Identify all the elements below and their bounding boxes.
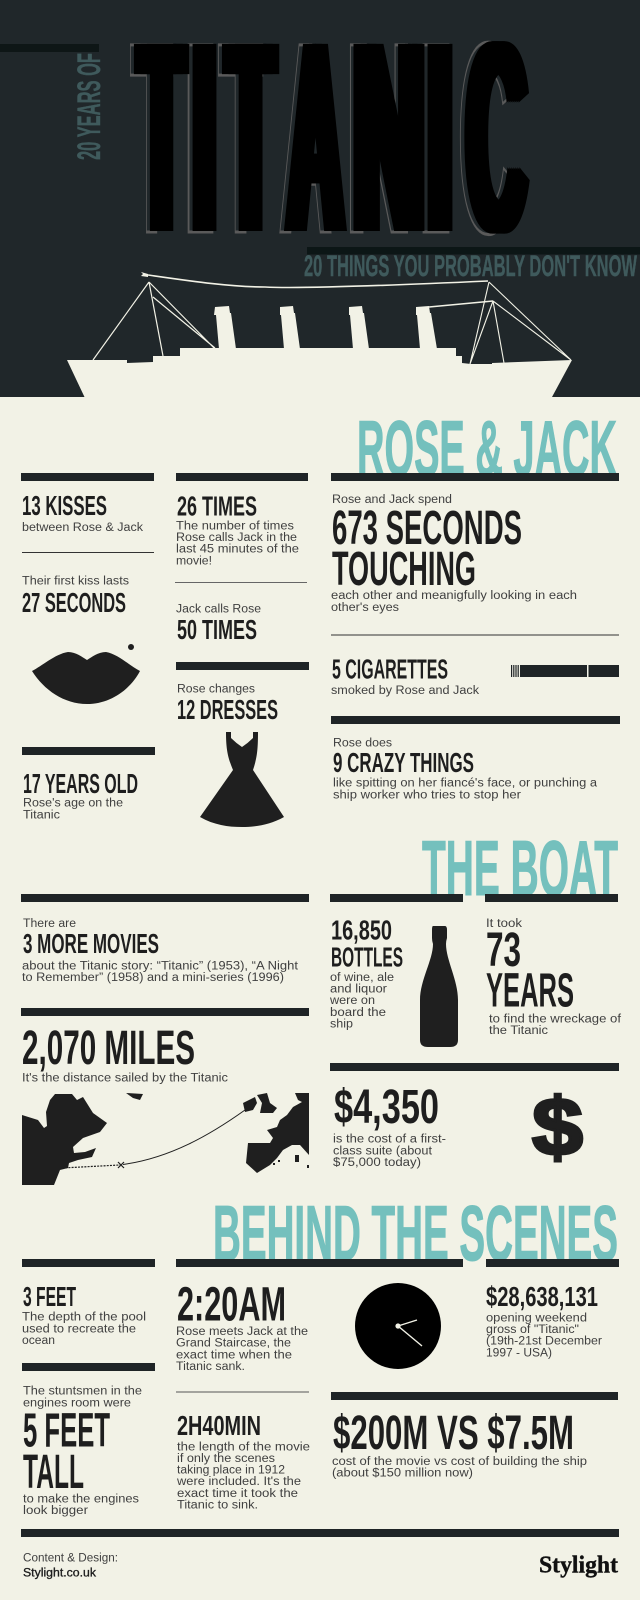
stat: 2h40min: exact time it took the (177, 1488, 298, 1500)
stat: 2:20am: Grand Staircase, the (176, 1338, 291, 1350)
stat: 3 feet (22, 1281, 146, 1347)
stat: 16,850 bottles: board the (330, 1007, 386, 1019)
stat: 16,850 bottles: of wine, ale (330, 972, 394, 984)
icon: dollar sign: $ (532, 1082, 583, 1173)
stat: 12 dresses: 12 DRESSES (177, 694, 278, 725)
stat: 16,850 bottles: and liquor (330, 984, 387, 996)
section: Behind the Scenes (22, 1189, 619, 1517)
stat: 26 times: Rose calls Jack in the (176, 532, 297, 544)
stat: opening weekend gross (486, 1281, 602, 1359)
stat: 5 cigarettes: 5 CIGARETTES (332, 654, 448, 685)
stat: opening weekend gross: 1997 - USA) (486, 1347, 552, 1359)
stat: $4,350: class suite (about (333, 1146, 433, 1158)
stat: 5 cigarettes (331, 654, 479, 697)
stat: 2h40min (176, 1410, 310, 1511)
stat: 2:20am: exact time when the (176, 1349, 292, 1361)
stat: 73 years (486, 918, 622, 1037)
section: Rose & Jack (21, 404, 620, 827)
stat: 26 times: last 45 minutes of the (176, 544, 299, 556)
stat: 16,850 bottles: ship (330, 1018, 353, 1030)
stat: 673 seconds touching: each other and meanigfully looking in each (331, 590, 577, 602)
stat: 2:20am (176, 1279, 308, 1373)
credits: Stylight.co.uk (23, 1568, 96, 1580)
credits (23, 1553, 118, 1580)
stat: 16,850 bottles: 16,850 (331, 914, 392, 945)
footer (21, 1529, 619, 1580)
stat: 16,850 bottles (329, 914, 403, 1030)
stat: 26 times: movie! (176, 555, 212, 567)
stat: 73 years: 73 (486, 924, 521, 977)
bar: subtitle accent (307, 247, 640, 254)
stat: 5 feet tall: look bigger (23, 1505, 88, 1517)
stat: 73 years: It took (486, 918, 522, 930)
stat: 673 seconds touching: TOUCHING (332, 543, 476, 596)
stat: 3 more movies (22, 918, 299, 984)
stat: 673 seconds touching: other's eyes (331, 602, 399, 614)
stat: 5 cigarettes: smoked by Rose and Jack (331, 685, 479, 697)
stat: 2,070 miles (22, 1022, 228, 1085)
stat: 2h40min: Titanic to sink. (177, 1499, 258, 1511)
stat: opening weekend gross: (19th-21st December (486, 1336, 602, 1348)
stat: 17 years old: 17 YEARS OLD (23, 768, 138, 799)
stat: 16,850 bottles: were on (329, 995, 375, 1007)
stat: 5 feet tall: TALL (23, 1446, 84, 1499)
stat: $4,350: $4,350 (334, 1081, 439, 1134)
divider bars (22, 1259, 619, 1267)
stat: first kiss 27 seconds (22, 576, 129, 618)
stat: 26 times: 26 TIMES (177, 490, 257, 522)
stat: 2h40min: were included. It's the (176, 1476, 301, 1488)
stat: 2,070 miles: It's the distance sailed by the Titanic (22, 1073, 228, 1085)
divider bars (21, 894, 618, 902)
stat: 50 times: Jack calls Rose (176, 604, 261, 616)
stat: 26 times (176, 490, 299, 567)
stat: 16,850 bottles: BOTTLES (331, 942, 403, 973)
icon: lips (32, 644, 140, 704)
stat: 5 feet tall: to make the engines (23, 1494, 139, 1506)
stat: 3 more movies: There are (23, 918, 76, 930)
stat: $4,350 (333, 1081, 446, 1169)
icon: bottle (420, 926, 458, 1047)
stat: 17 years old: Rose's age on the (23, 798, 123, 810)
stat: 673 seconds touching (331, 494, 577, 614)
stat: opening weekend gross: gross of "Titanic" (486, 1324, 579, 1336)
stat: 2h40min: 2H40MIN (177, 1410, 261, 1441)
stat: 2:20am: Rose meets Jack at the (176, 1326, 308, 1338)
stat: 2:20am: Titanic sank. (176, 1361, 245, 1373)
stat: 73 years: the Titanic (489, 1025, 548, 1037)
stat: 12 dresses: Rose changes (177, 684, 255, 696)
stat: 2,070 miles: 2,070 MILES (22, 1022, 195, 1075)
stat: 673 seconds touching: Rose and Jack spend (332, 494, 452, 506)
stat: 9 crazy things: ship worker who tries to stop her (333, 789, 521, 801)
stat: 5 feet tall (23, 1386, 142, 1517)
stat: first kiss 27 seconds: Their first kiss lasts (22, 576, 129, 588)
stat: 13 kisses: 13 KISSES (22, 490, 107, 521)
icon: dress (200, 732, 284, 827)
stat: $4,350: $75,000 today) (333, 1157, 421, 1169)
stat: 3 more movies: about the Titanic story: “Titanic” (1953), “A Night (22, 960, 299, 972)
divider bars (21, 473, 619, 481)
stat: $200M vs $7.5M: cost of the movie vs cost of building the ship (332, 1456, 587, 1468)
icon: ship (67, 272, 572, 397)
stat: 9 crazy things (333, 738, 598, 801)
title: Titanic outline layer (130, 0, 516, 290)
section: The Boat (21, 824, 622, 1185)
logo: Stylight: Stylight (539, 1553, 618, 1579)
stat: $200M vs $7.5M: (about $150 million now) (332, 1468, 473, 1480)
stat: 3 feet: The depth of the pool (22, 1312, 146, 1324)
stat: 50 times: 50 TIMES (177, 614, 257, 645)
stat: 73 years: to find the wreckage of (489, 1013, 622, 1025)
stat: 3 more movies: to Remember” (1958) and a mini-series (1996) (22, 972, 284, 984)
stat: 5 feet tall: The stuntsmen in the (23, 1386, 142, 1398)
map: Atlantic route (22, 1093, 309, 1185)
stat: $4,350: is the cost of a first- (333, 1134, 446, 1146)
stat: 5 feet tall: engines room were (23, 1397, 131, 1409)
stat: opening weekend gross: opening weekend (486, 1313, 587, 1325)
stat: 13 kisses: between Rose & Jack (22, 522, 143, 534)
stat: 17 years old (23, 768, 138, 821)
stat: 26 times: The number of times (176, 520, 294, 532)
panel: header (0, 0, 640, 397)
stat: 9 crazy things: 9 CRAZY THINGS (333, 747, 474, 778)
title: Titanic (133, 0, 532, 289)
bar: header left accent (0, 44, 99, 52)
icon: clock (355, 1283, 441, 1369)
stat: 2h40min: the length of the movie (177, 1442, 310, 1454)
stat: 2h40min: if only the scenes (177, 1453, 275, 1465)
stat: 3 feet: ocean (22, 1335, 55, 1347)
stat: 5 feet tall: 5 FEET (23, 1405, 110, 1458)
stat: 3 feet: used to recreate the (22, 1323, 136, 1335)
stat: 9 crazy things: like spitting on her fiancé's face, or punching a (333, 778, 598, 790)
stat: 2h40min: taking place in 1912 (177, 1465, 285, 1477)
stat: 17 years old: Titanic (23, 809, 60, 821)
stat: first kiss 27 seconds: 27 SECONDS (22, 587, 126, 618)
icon: cigarette (511, 665, 619, 677)
stat: 50 times (176, 604, 261, 645)
stat: 2:20am: 2:20AM (177, 1279, 286, 1332)
stat: 13 kisses (22, 490, 143, 534)
stat: 3 more movies: 3 MORE MOVIES (23, 928, 159, 959)
stat: opening weekend gross: $28,638,131 (486, 1281, 598, 1312)
stat: 12 dresses (177, 684, 278, 725)
stat: 9 crazy things: Rose does (333, 738, 392, 750)
stat: $200M vs $7.5M (332, 1407, 587, 1480)
credits: Content & Design: (23, 1553, 118, 1565)
stat: 3 feet: 3 FEET (23, 1281, 76, 1312)
